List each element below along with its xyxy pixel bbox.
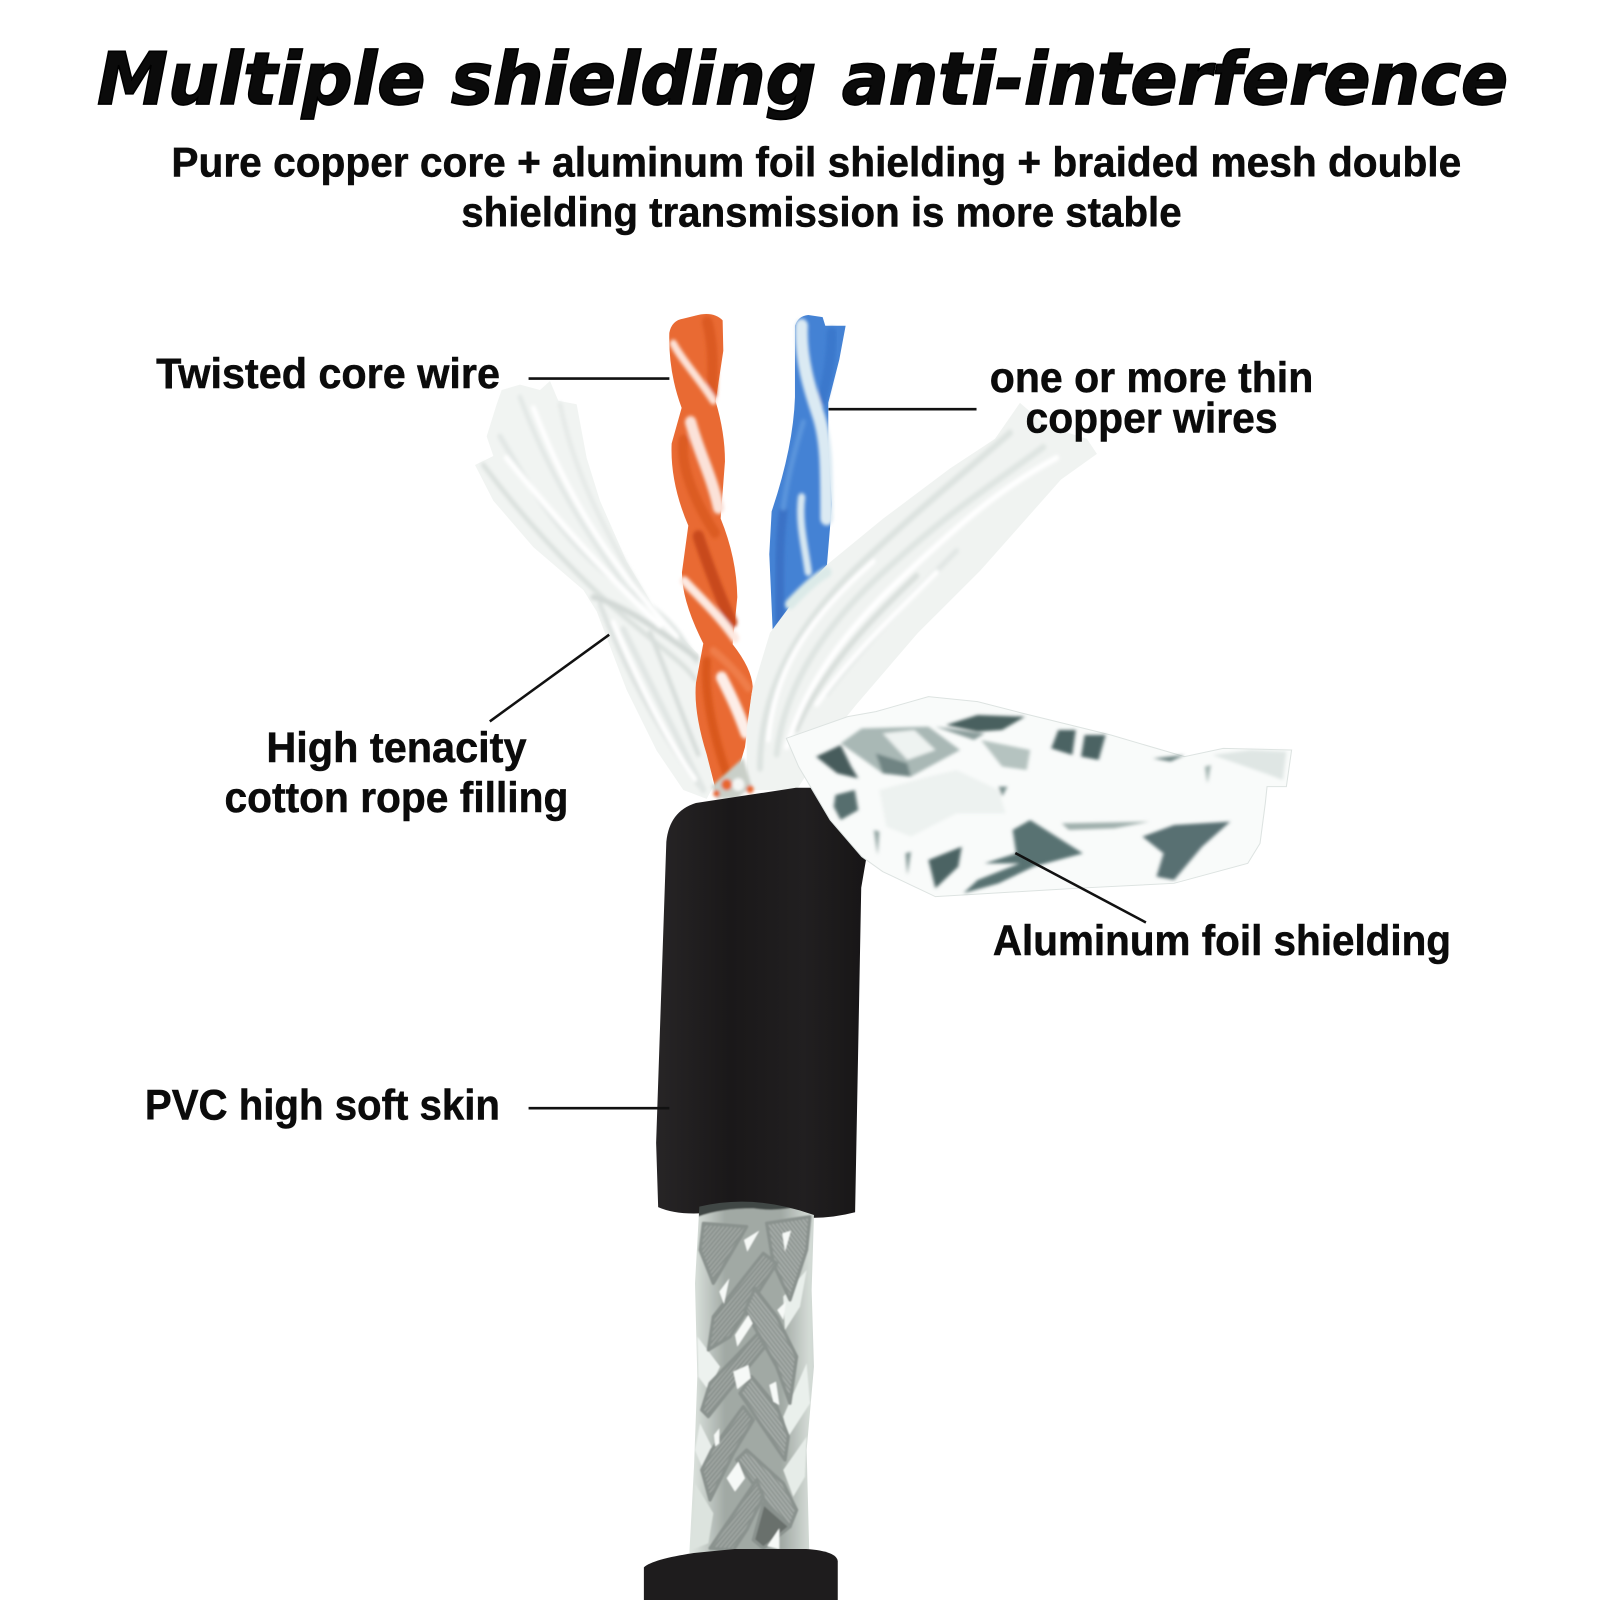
callout: cotton rope filling <box>224 635 609 821</box>
title <box>97 38 1508 122</box>
braided mesh shield <box>690 1202 814 1554</box>
title: Multiple <box>97 38 426 122</box>
callout: twisted core wire: Twisted core wire <box>156 350 500 397</box>
callout: thin copper wires: copper wires <box>1026 395 1278 442</box>
cotton rope filling, left bundle <box>475 381 713 799</box>
subtitle: shielding transmission is more stable <box>461 189 1182 236</box>
strand ends at cable core <box>712 758 754 799</box>
title: shielding <box>451 38 816 122</box>
orange twisted core wire <box>669 314 753 794</box>
blue twisted core wire <box>769 315 846 661</box>
callout: thin copper wires <box>829 354 1313 442</box>
cable illustration <box>475 314 1292 1600</box>
subtitle: Pure copper core + aluminum foil shielding + braided mesh double <box>171 139 1461 186</box>
callout: PVC skin: PVC high soft skin <box>145 1081 500 1128</box>
title: anti-interference <box>842 38 1508 122</box>
PVC jacket, lower section <box>644 1549 838 1600</box>
callout: aluminum foil shielding <box>993 853 1451 964</box>
callout: aluminum foil shielding: Aluminum foil shielding <box>993 917 1451 964</box>
callout: thin copper wires: one or more thin <box>990 354 1313 401</box>
cotton rope filling, right bundle <box>712 403 1097 799</box>
PVC jacket, upper section <box>656 788 867 1218</box>
callout: cotton rope filling: cotton rope filling <box>224 774 568 821</box>
aluminum foil shielding <box>786 697 1292 897</box>
callout: cotton rope filling: High tenacity <box>266 724 527 771</box>
subtitle <box>171 139 1461 236</box>
